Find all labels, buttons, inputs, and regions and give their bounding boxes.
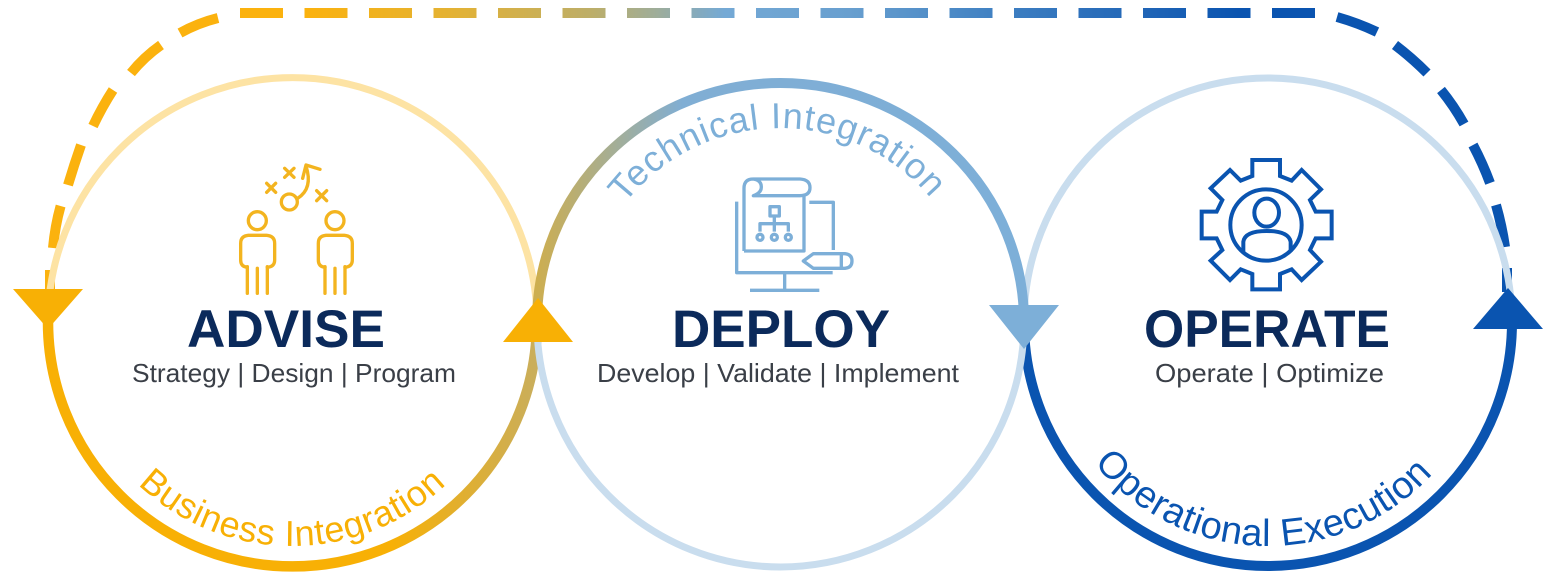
loop arrow: dashed feedback path [50,13,1507,292]
arrow: advise down [13,289,83,329]
arrow: operate up [1473,288,1543,329]
text: deploy subtitle: Develop | Validate | Implement [597,358,960,388]
icon: operate gear with person [1202,160,1332,289]
panel: advise circle [48,78,537,566]
label: operational execution: Operational Execution [1100,452,1432,546]
text: advise subtitle: Strategy | Design | Program [132,358,456,388]
text: operate subtitle: Operate | Optimize [1155,358,1384,388]
arrow: deploy down [989,305,1059,349]
icon: advise strategy people [241,165,352,293]
heading: deploy: DEPLOY [672,300,890,359]
arrow: advise up [503,298,573,342]
icon: deploy blueprint monitor [737,179,852,290]
panel: operate circle [1024,78,1512,566]
label: business integration: Business Integration [140,468,445,546]
panel: deploy circle [537,83,1024,567]
heading: operate: OPERATE [1144,300,1390,359]
label: technical integration: Technical Integration [606,103,942,196]
heading: advise: ADVISE [187,300,385,359]
